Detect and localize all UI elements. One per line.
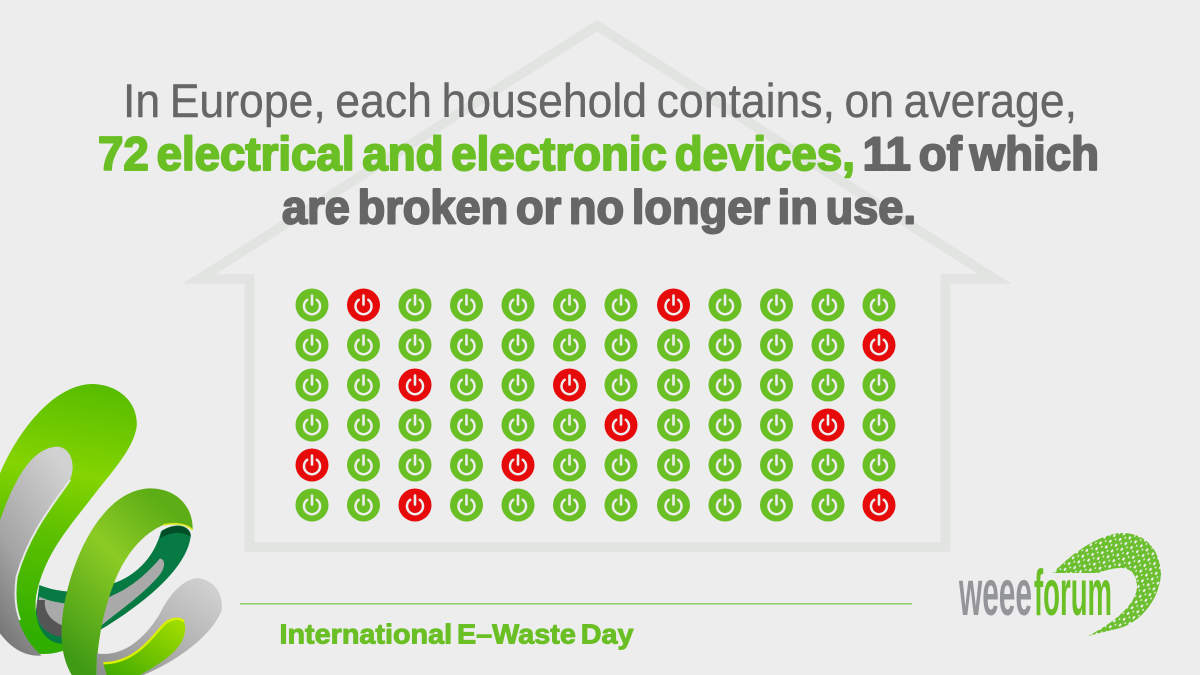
row 4	[296, 408, 896, 442]
row 5	[296, 448, 896, 482]
grey inner swoosh	[0, 447, 73, 656]
headline line 3: are broken or no longer in use.	[282, 180, 916, 234]
device grid: 72 power icons, 11 red	[296, 288, 896, 522]
row 1	[296, 288, 896, 322]
icon: swirl emblem bottom left	[0, 384, 222, 675]
logo: weeeforum	[959, 533, 1161, 636]
row 3	[296, 368, 896, 402]
headline	[98, 75, 1099, 234]
house outline	[199, 26, 995, 547]
big green swoosh	[0, 384, 137, 654]
row 2	[296, 328, 896, 362]
logo swoosh	[1053, 533, 1161, 636]
headline line 1: In Europe, each household contains, on average,	[123, 75, 1077, 128]
green inner curl	[103, 619, 185, 675]
footer rule	[240, 603, 912, 604]
footer label: International E–Waste Day	[280, 618, 634, 650]
grey lower curl	[97, 578, 222, 675]
logo: weeeforum: weee	[959, 556, 1032, 629]
back ring: dark green band	[36, 525, 191, 645]
second green ring	[62, 488, 193, 675]
row 6	[296, 488, 896, 522]
headline line 2: 72 electrical and electronic devices, 11 of which	[98, 127, 1099, 180]
